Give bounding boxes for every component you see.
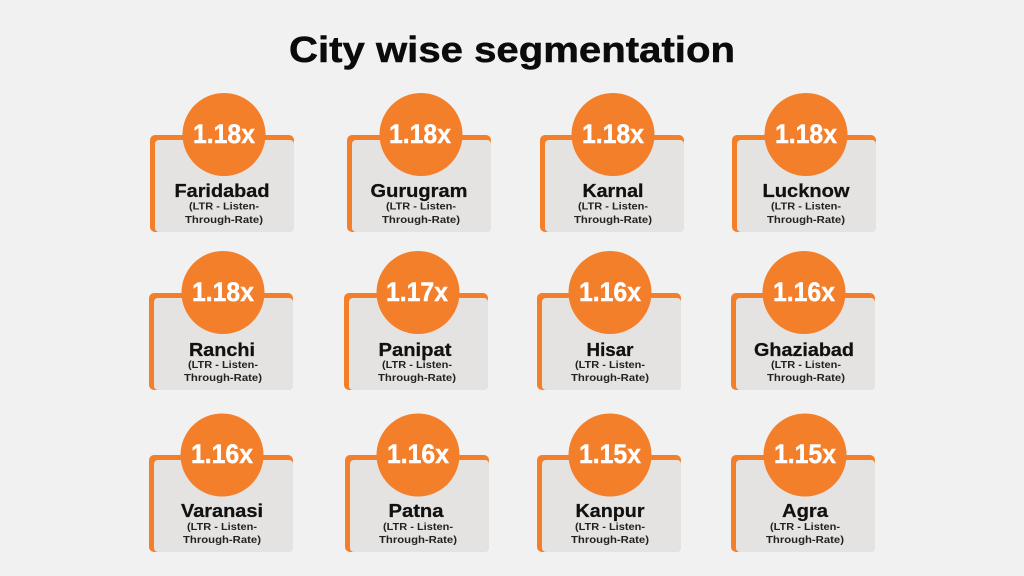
card: Gurugram: 1.18x bbox=[389, 119, 451, 149]
card: Ghaziabad: Ghaziabad bbox=[754, 339, 854, 360]
card: Faridabad bbox=[150, 93, 294, 232]
card: Hisar: (LTR - Listen- bbox=[575, 360, 645, 371]
card: Panipat: 1.17x bbox=[386, 277, 448, 307]
title: City wise segmentation bbox=[289, 29, 735, 70]
card: Agra: (LTR - Listen- bbox=[770, 522, 840, 533]
card: Karnal: Karnal bbox=[582, 180, 644, 201]
card: Ghaziabad: 1.16x bbox=[773, 277, 835, 307]
card: Kanpur: (LTR - Listen- bbox=[575, 522, 645, 533]
card: Varanasi: Through-Rate) bbox=[183, 535, 261, 546]
card: Kanpur: Through-Rate) bbox=[571, 535, 649, 546]
card: Kanpur: 1.15x bbox=[579, 439, 641, 469]
card: Ranchi: 1.18x bbox=[192, 277, 254, 307]
card: Lucknow bbox=[732, 93, 876, 232]
card: Faridabad: Faridabad bbox=[174, 180, 270, 201]
card: Faridabad: 1.18x bbox=[193, 119, 255, 149]
card: Panipat: (LTR - Listen- bbox=[382, 360, 452, 371]
card: Ghaziabad: Through-Rate) bbox=[767, 373, 845, 384]
card: Karnal bbox=[540, 93, 684, 232]
card: Lucknow: (LTR - Listen- bbox=[771, 202, 841, 212]
card: Gurugram: (LTR - Listen- bbox=[386, 202, 456, 212]
card: Agra: 1.15x bbox=[774, 439, 836, 469]
card: Hisar: Through-Rate) bbox=[571, 373, 649, 384]
card: Gurugram: Through-Rate) bbox=[382, 215, 460, 226]
card: Kanpur bbox=[537, 414, 681, 552]
card: Karnal: Through-Rate) bbox=[574, 215, 652, 226]
card: Hisar: Hisar bbox=[586, 339, 634, 360]
card: Agra bbox=[731, 414, 875, 552]
card: Hisar bbox=[537, 251, 681, 390]
card: Patna: Patna bbox=[388, 500, 444, 521]
card: Ranchi: (LTR - Listen- bbox=[188, 360, 258, 371]
card: Faridabad: Through-Rate) bbox=[185, 215, 263, 226]
card: Faridabad: (LTR - Listen- bbox=[189, 202, 259, 212]
card: Kanpur: Kanpur bbox=[576, 500, 644, 521]
card: Varanasi: Varanasi bbox=[181, 500, 263, 521]
card: Gurugram: Gurugram bbox=[370, 180, 468, 201]
card: Ranchi bbox=[149, 251, 293, 390]
card: Ghaziabad: (LTR - Listen- bbox=[771, 360, 841, 371]
card: Agra: Agra bbox=[782, 500, 829, 521]
card: Panipat: Panipat bbox=[378, 339, 452, 360]
card: Varanasi bbox=[149, 414, 293, 552]
card: Lucknow: 1.18x bbox=[775, 119, 837, 149]
card: Ranchi: Ranchi bbox=[189, 339, 255, 360]
card: Lucknow: Through-Rate) bbox=[767, 215, 845, 226]
card: Karnal: 1.18x bbox=[582, 119, 644, 149]
card: Gurugram bbox=[347, 93, 491, 232]
card: Varanasi: (LTR - Listen- bbox=[187, 522, 257, 533]
card: Ranchi: Through-Rate) bbox=[184, 373, 262, 384]
card: Patna: Through-Rate) bbox=[379, 535, 457, 546]
card: Patna: (LTR - Listen- bbox=[383, 522, 453, 533]
card: Lucknow: Lucknow bbox=[762, 180, 850, 201]
card: Hisar: 1.16x bbox=[579, 277, 641, 307]
card: Panipat bbox=[344, 251, 488, 390]
card: Karnal: (LTR - Listen- bbox=[578, 202, 648, 212]
card: Patna: 1.16x bbox=[387, 439, 449, 469]
card: Panipat: Through-Rate) bbox=[378, 373, 456, 384]
card: Varanasi: 1.16x bbox=[191, 439, 253, 469]
card: Agra: Through-Rate) bbox=[766, 535, 844, 546]
card: Patna bbox=[345, 414, 489, 552]
card: Ghaziabad bbox=[731, 251, 875, 390]
